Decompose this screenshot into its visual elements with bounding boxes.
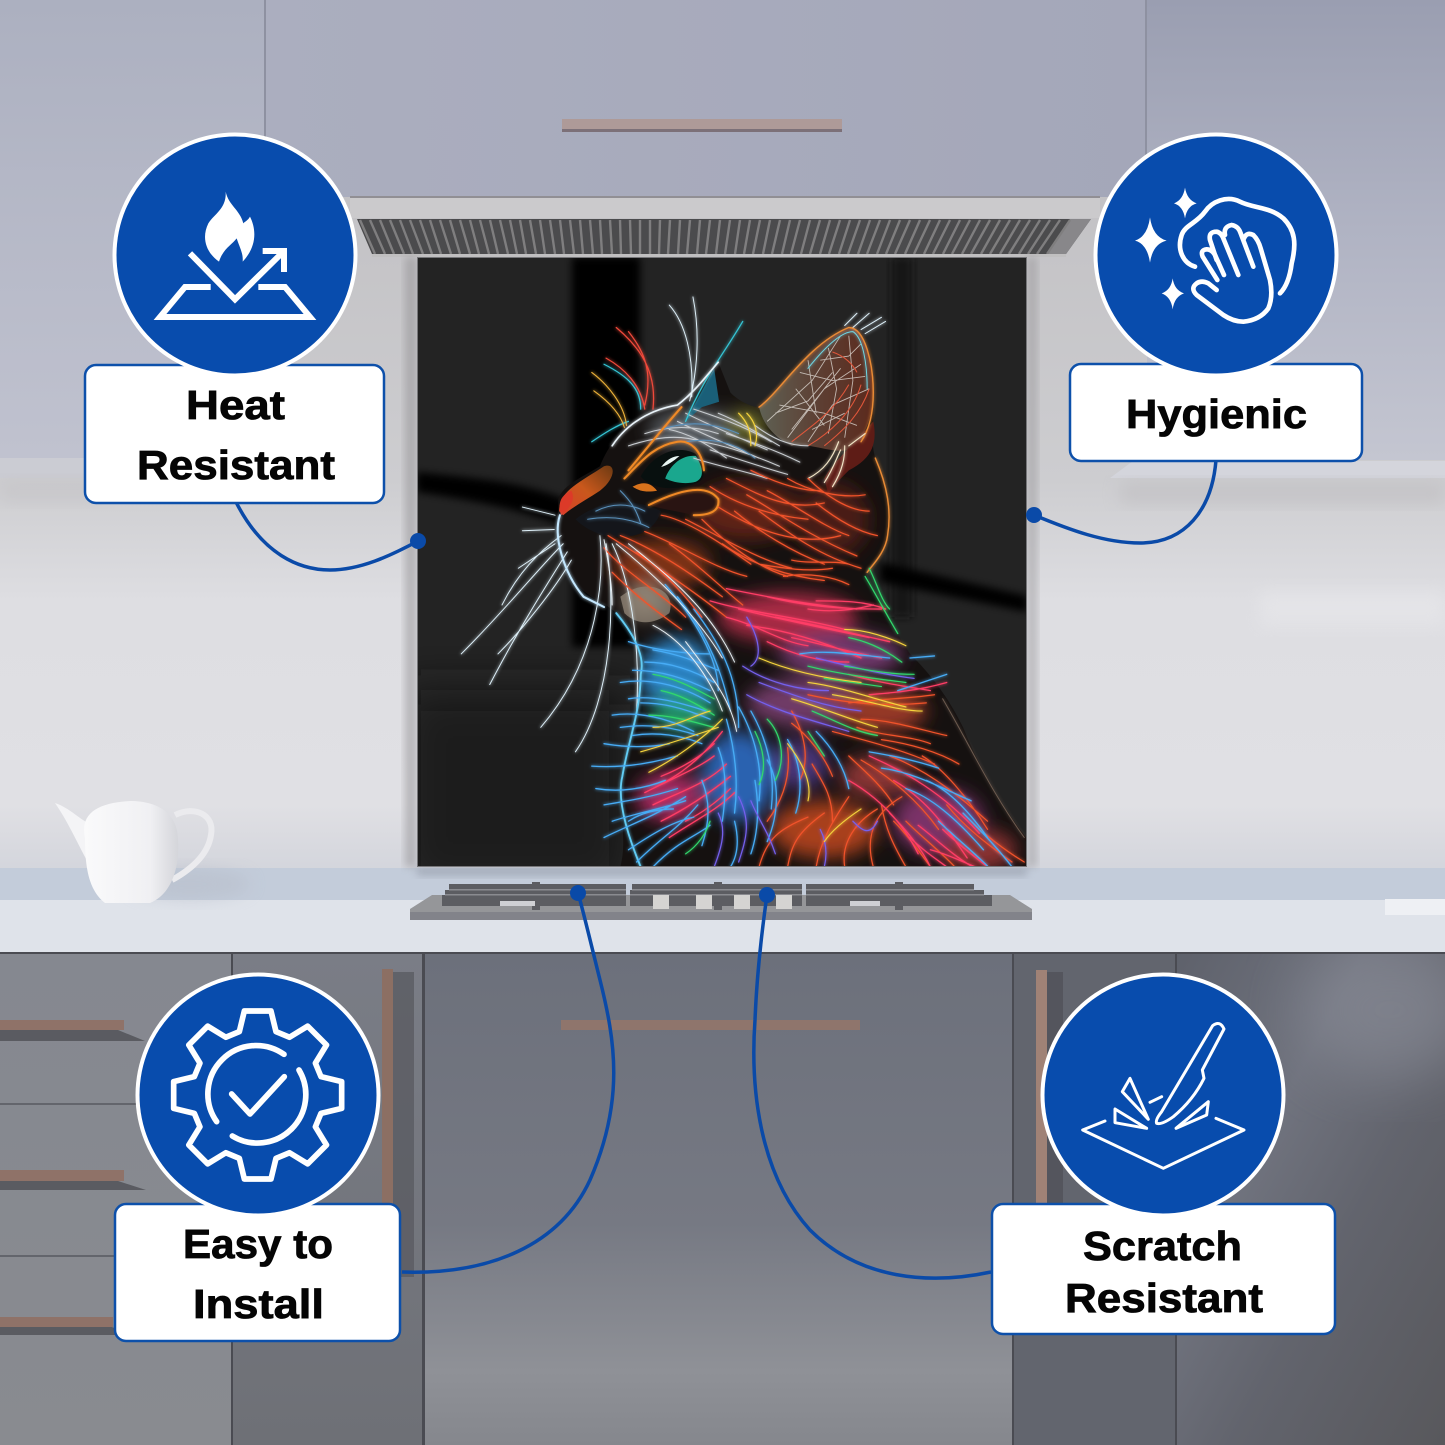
range hood: [350, 196, 1100, 257]
white chest patch: [620, 587, 671, 622]
label box: [1070, 364, 1362, 461]
callout: easy to install: [115, 972, 400, 1341]
panel background: [400, 257, 1027, 890]
ear outline: [759, 328, 889, 572]
callout: heat resistant: [85, 132, 384, 503]
callout: hygienic: [1070, 132, 1362, 461]
badge circle: [1094, 132, 1338, 378]
ear fur web: [767, 336, 869, 442]
green fur: [649, 568, 914, 854]
connector: heat resistant: [235, 500, 426, 570]
white fine fur: [604, 540, 737, 731]
label box: [992, 1204, 1335, 1334]
whiskers: [461, 297, 886, 752]
ear warm strands: [792, 352, 869, 446]
blue fur: [592, 585, 1012, 867]
heading: hygienic: Hygienic: [1126, 391, 1307, 437]
drawer handles: [0, 1020, 146, 1335]
lower cabinets: [0, 940, 1445, 1445]
cabinet handle: [562, 119, 842, 132]
ear: [759, 328, 873, 451]
counter: [0, 866, 1445, 953]
orange-red fur: [604, 470, 1024, 867]
face edge: [558, 515, 604, 607]
fur strokes: [461, 297, 1024, 867]
connector: easy to install: [402, 885, 614, 1272]
badge circle: [112, 132, 358, 378]
connector: hygienic: [1026, 460, 1216, 543]
heading: scratch: Scratch: [1083, 1223, 1242, 1269]
small ear: [686, 368, 719, 421]
icon: flame on surface: [160, 192, 310, 317]
purple fur: [714, 617, 914, 867]
cat illustration: [461, 297, 1026, 870]
upper cabinets: [0, 0, 1445, 626]
door handles: [382, 969, 1063, 1277]
icon: gear with check: [174, 1011, 342, 1179]
back outline: [943, 699, 1024, 838]
callout: scratch resistant: [992, 972, 1335, 1334]
heading: heat: Heat: [186, 382, 285, 428]
cyan neck edge: [616, 613, 642, 867]
cat silhouette: [557, 328, 1026, 867]
connector: scratch resistant: [754, 887, 991, 1278]
wall: [0, 197, 1445, 872]
heading: resistant: Resistant: [137, 442, 335, 488]
heading: resistant: Resistant: [1065, 1275, 1263, 1321]
cooktop: [410, 882, 1032, 920]
icon: knife scratching surface: [1083, 1023, 1244, 1168]
yellow fur: [641, 413, 922, 842]
label box: [85, 365, 384, 503]
heading: install: Install: [193, 1281, 324, 1327]
grey head fur: [628, 409, 808, 478]
heading: easy to: Easy to: [183, 1221, 333, 1267]
badge circle: [1040, 972, 1286, 1218]
teapot: [55, 801, 250, 903]
badge circle: [136, 972, 380, 1218]
icon: hand wiping with sparkles: [1135, 188, 1294, 322]
muzzle and eye: [559, 450, 718, 537]
pink fur: [645, 589, 988, 867]
glass panel with neon cat: [400, 257, 1037, 890]
colour fields: [612, 409, 1016, 870]
label box: [115, 1204, 400, 1341]
